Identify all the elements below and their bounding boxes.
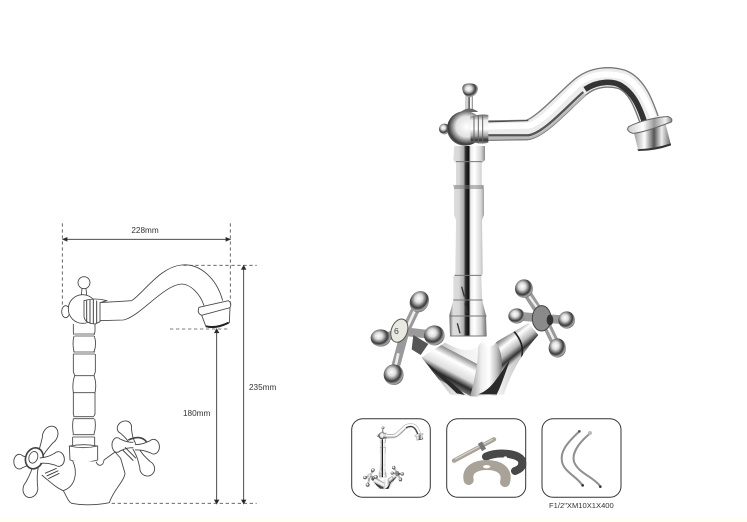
dimension label: total height: 235mm xyxy=(249,383,276,392)
threaded bolt xyxy=(454,439,494,461)
column xyxy=(449,146,487,336)
technical line drawing with dimensions xyxy=(14,223,257,505)
spout outline xyxy=(98,265,223,321)
width dimension arrow xyxy=(63,238,230,241)
black washer xyxy=(486,454,522,471)
silver washer xyxy=(468,465,506,482)
dimension label: outlet height: 180mm xyxy=(183,409,210,418)
collar xyxy=(470,114,488,144)
finial xyxy=(461,83,478,112)
spout height dimension arrow xyxy=(215,329,219,504)
thumbnail: mounting parts xyxy=(447,419,526,497)
aerator xyxy=(628,117,672,151)
total height dimension arrow xyxy=(242,266,246,504)
right cross handle outline xyxy=(112,419,160,479)
spout xyxy=(485,74,653,138)
body outline xyxy=(63,452,125,505)
thumbnail: faucet xyxy=(352,419,430,497)
ball hub xyxy=(447,111,483,146)
collar outline xyxy=(84,299,107,324)
column outline xyxy=(73,324,96,445)
finial and hub outline xyxy=(62,277,97,323)
main product photo: chrome faucet xyxy=(371,74,672,400)
right cross handle xyxy=(508,279,575,358)
dimension label: width: 228mm xyxy=(131,226,159,235)
left cross handle outline xyxy=(14,423,65,499)
left cross handle xyxy=(371,288,445,385)
base collar outline xyxy=(69,445,98,462)
left button xyxy=(439,124,450,134)
hose specification caption: F1/2"XM10X1X400 xyxy=(549,501,614,510)
aerator outline xyxy=(198,301,231,328)
body xyxy=(410,320,543,400)
left cross handle: 6 xyxy=(394,326,399,336)
dashed extension lines xyxy=(62,223,257,503)
thumbnail: flexible hoses xyxy=(542,419,621,497)
